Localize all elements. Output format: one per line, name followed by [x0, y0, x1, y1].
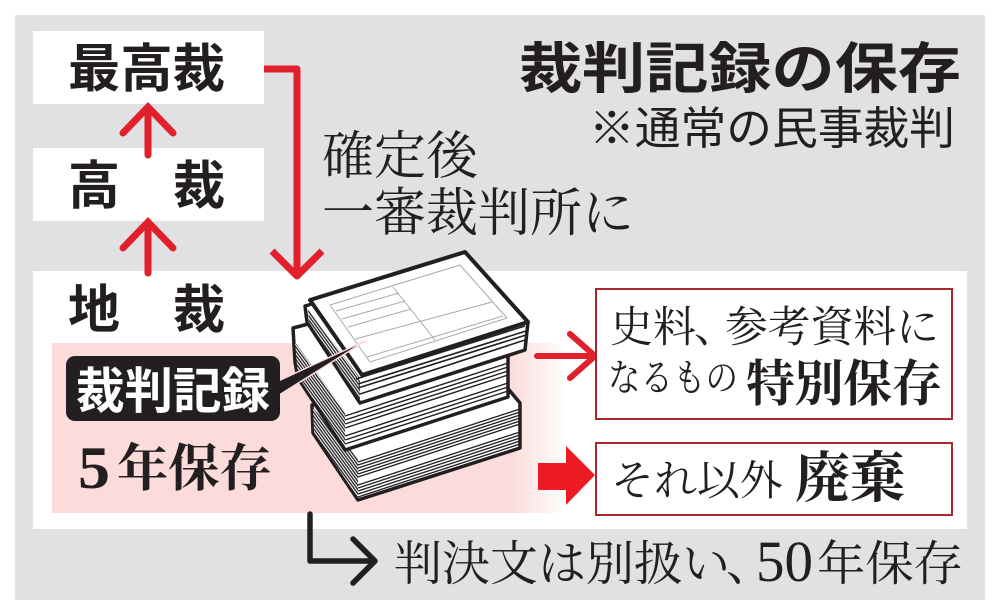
box: high court	[33, 148, 264, 221]
text: judgment kept 50 years: 年保存	[817, 538, 962, 591]
label: district court: 地	[68, 282, 120, 340]
box: supreme court: 最高裁	[68, 41, 225, 99]
text: judgment kept 50 years: 50	[756, 529, 813, 594]
upper pile	[305, 260, 528, 403]
text: after finalization: 確定後	[322, 129, 479, 186]
panel: pink 5-year storage area	[52, 343, 567, 513]
box: special preservation: 、	[694, 305, 737, 352]
callout: court records label	[66, 340, 367, 421]
text: judgment kept 50 years: 判決文は別扱い	[394, 538, 730, 591]
text: judgment kept 50 years: 、	[726, 538, 774, 591]
arrow: judgment branch	[310, 514, 375, 583]
label: district court	[68, 282, 225, 340]
box: special preservation: なるもの	[608, 358, 738, 400]
arrow: supreme court to first-instance court	[264, 69, 322, 276]
box: high court: 裁	[173, 158, 225, 216]
arrow: to special preservation	[537, 334, 595, 378]
arrow: to disposal	[538, 446, 595, 505]
box: disposal: それ以外	[611, 459, 783, 505]
box: special preservation	[596, 289, 952, 419]
middle pile	[293, 300, 508, 450]
box: supreme court	[33, 31, 264, 104]
box: disposal	[596, 443, 952, 515]
icon: stack of records	[293, 252, 528, 500]
arrow: high court to supreme court	[123, 107, 173, 155]
callout: court records label: 裁判記録	[76, 365, 270, 419]
arrow: district court to high court	[123, 222, 173, 273]
text: judgment kept 50 years	[394, 529, 962, 594]
text: five-year storage	[78, 435, 271, 501]
box: special preservation: 史料	[610, 305, 696, 352]
text: five-year storage: 5	[78, 435, 110, 501]
title: 裁判記録の保存	[519, 38, 961, 100]
text: five-year storage: 年保存	[117, 441, 271, 498]
box: disposal: 廃棄	[795, 448, 905, 509]
bottom pile	[312, 385, 520, 500]
panel: district court band	[33, 271, 967, 529]
box: special preservation: 参考資料に	[725, 305, 939, 352]
box: high court: 高	[68, 158, 120, 216]
label: district court: 裁	[173, 282, 225, 340]
top sheet	[310, 252, 528, 375]
subtitle: ※通常の民事裁判	[589, 103, 955, 154]
text: to court of first instance: 一審裁判所に	[322, 186, 634, 243]
box: special preservation: 特別保存	[746, 356, 941, 412]
